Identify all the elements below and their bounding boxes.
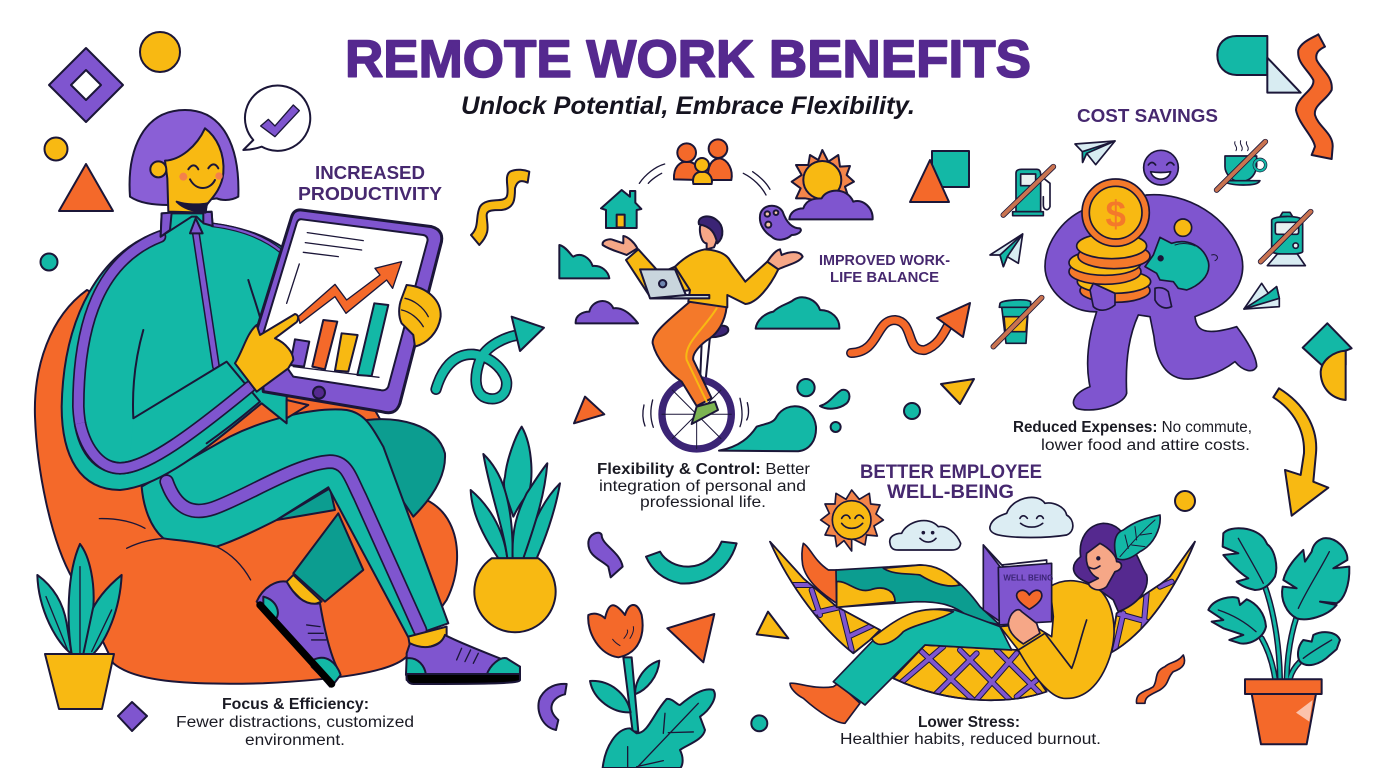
hand [1008,610,1040,644]
icon: gas pump crossed [1003,167,1053,216]
shapes: square and triangle [910,151,969,202]
speech bubble check [243,86,310,151]
text: reduced expenses [1013,419,1252,454]
subtitle: Unlock Potential, Embrace Flexibility. [461,92,915,120]
smiling sun [821,490,883,551]
squiggle: purple [588,533,623,577]
text: reduced expenses: Reduced Expenses: No commute, [1013,419,1252,436]
arrow: teal loop [436,317,544,399]
panel: well-being illustration: WELL BEING [1003,574,1053,583]
back shoe [257,575,341,687]
forearm sleeve [80,330,260,468]
panel: increased productivity illustration [35,86,520,709]
clouds [559,245,609,278]
text: flexibility and control [597,461,810,511]
text: lower stress: Healthier habits, reduced burnout. [840,731,1101,748]
arrow: orange wave [851,303,970,353]
heading: increased productivity [298,162,443,204]
heading: improved work-life balance [819,253,950,286]
front leg [142,409,448,637]
laptop [640,269,687,298]
purple diamond [118,702,147,731]
head [700,224,717,249]
title: REMOTE WORK BENEFITS [345,30,1031,89]
decorative shapes: top right [1217,34,1333,159]
heading: increased productivity: INCREASED [315,162,425,183]
sun and cloud [792,150,854,202]
clouds [890,521,961,550]
torso [1000,581,1114,698]
family icon [674,158,732,180]
yellow dot [1175,491,1195,511]
purple crescent [538,684,567,730]
panel: work-life balance illustration [559,139,873,451]
figure body [1045,195,1257,410]
icon: coffee crossed [1217,141,1266,190]
person legs [653,302,727,406]
jacket stripes [78,237,250,468]
text: focus and efficiency: Fewer distractions, customized [176,714,414,731]
leaf [1115,515,1160,560]
squiggle: yellow [471,170,529,245]
piggy bank [1145,237,1209,290]
legs and feet [802,543,837,603]
heading: better employee well-being: WELL-BEING [887,482,1014,503]
heading: increased productivity: PRODUCTIVITY [298,183,443,204]
tablet [257,210,442,413]
smiley [1144,150,1178,185]
heading: better employee well-being [860,462,1042,503]
front shoe [406,627,520,684]
shoe [692,402,718,424]
head [130,110,238,205]
icon: paper planes [990,141,1279,309]
text: flexibility and control: professional life. [640,494,766,511]
beanbag [35,290,457,684]
bottom centre shapes [538,533,788,768]
jacket body [62,212,287,490]
heading: cost savings: COST SAVINGS [1077,106,1218,126]
panel: well-being illustration [770,490,1195,723]
book [983,545,1005,625]
hand: left [1090,283,1115,310]
arrow: curved yellow [1273,388,1328,516]
heading: improved work-life balance: LIFE BALANCE [830,270,939,286]
triangle: orange [667,614,714,662]
face [1086,543,1121,590]
text: flexibility and control: Flexibility & Control: Better [597,461,810,478]
coin stack [1069,233,1151,302]
text: reduced expenses: lower food and attire costs. [1041,437,1250,454]
triangle [574,397,604,423]
trend arrow [298,262,402,323]
triangle: yellow small [941,379,974,404]
plant: potted [1208,528,1349,744]
back leg [367,419,445,517]
plant: centre [471,427,560,632]
icon: coffee cup crossed [993,298,1042,347]
text: focus and efficiency: Focus & Efficiency: [222,696,369,713]
hands [235,314,298,392]
paint palette [760,206,801,240]
panel: cost savings illustration [990,141,1279,410]
tulip [588,605,715,768]
panel: right side shapes and plant [1208,323,1352,744]
hammock [770,542,1195,703]
hair [1074,523,1147,612]
decorative column: squiggle, arrow, plant [436,170,560,632]
text: focus and efficiency [176,696,414,749]
teal dot [751,715,767,731]
bar chart [290,303,388,376]
text: focus and efficiency: environment. [245,732,345,749]
text: lower stress [840,714,1101,748]
teal dot small [904,403,920,419]
heading: improved work-life balance: IMPROVED WORK- [819,253,950,269]
unicycle [700,337,710,383]
shapes: teal diamond and half circle [1303,323,1352,400]
dollar coin [1082,179,1149,246]
hands [603,236,637,255]
collar [161,213,213,237]
squiggle [1136,655,1185,703]
teal drops [797,379,815,396]
arc: teal [646,542,737,584]
plant: bottom left [37,544,122,709]
text: lower stress: Lower Stress: [918,714,1020,731]
jacket [626,249,690,297]
heading: better employee well-being: BETTER EMPLOYEE [860,462,1042,483]
decorative shapes: top left [40,32,180,270]
icon: train crossed [1261,212,1311,266]
text: flexibility and control: integration of personal and [599,478,806,495]
house icon [601,190,641,228]
panel: cost savings illustration: $ [1105,194,1126,235]
triangle: yellow [757,612,788,638]
